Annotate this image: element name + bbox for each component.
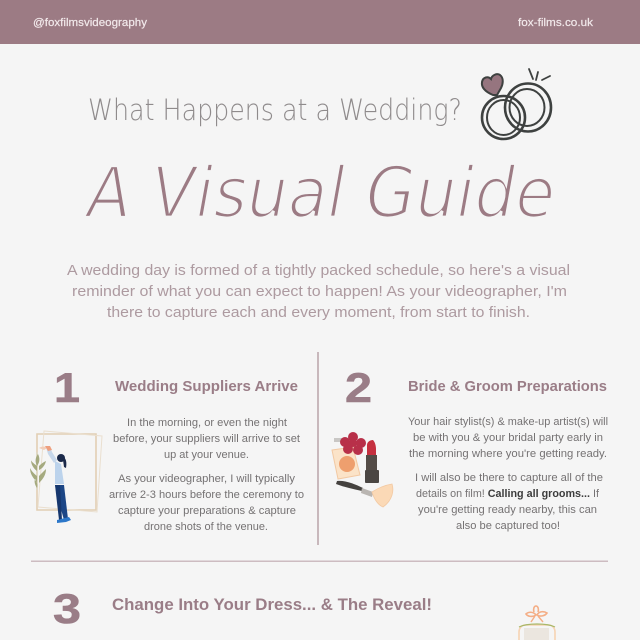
panel: step 3 <box>53 585 555 640</box>
text: step 2 body: details on film! Calling all grooms... If <box>416 488 600 500</box>
text: step 2 body: Your hair stylist(s) & make-up artist(s) will <box>408 416 608 428</box>
number 3: 3 <box>53 585 81 632</box>
text: step 1 body: In the morning, or even the night <box>127 417 287 429</box>
number 1: 1 <box>54 364 80 411</box>
text: step 1 body: before, your suppliers will arrive to set <box>113 433 300 445</box>
intro text: reminder of what you can expect to happen! As your videographer, I'm <box>72 283 567 300</box>
intro text: there to capture each and every moment, from start to finish. <box>107 304 530 321</box>
divider: horizontal <box>31 560 608 562</box>
text: step 1 body: arrive 2-3 hours before the ceremony to <box>109 489 304 501</box>
text: step 1 body <box>109 417 304 533</box>
text: step 1 body: capture your preparations & capture <box>118 505 296 517</box>
header bar: fox-films.co.uk <box>518 17 594 29</box>
icon: perfume, lipstick and brush <box>332 432 393 507</box>
heading: Bride & Groom Preparations: Bride & Groom Preparations <box>408 378 607 395</box>
intro text: A wedding day is formed of a tightly packed schedule, so here's a visual <box>67 262 570 279</box>
text: step 2 body: the morning where you're getting ready. <box>409 448 607 460</box>
heading: Change Into Your Dress... & The Reveal!: Change Into Your Dress... & The Reveal! <box>112 595 432 614</box>
panel: step 2 <box>332 364 608 532</box>
text: step 2 body: be with you & your bridal party early in <box>413 432 603 444</box>
text: step 1 body: drone shots of the venue. <box>144 521 268 533</box>
text: step 2 body <box>408 416 608 532</box>
title: A Visual Guide: A Visual Guide <box>83 152 555 234</box>
title: What Happens at a Wedding?: What Happens at a Wedding? <box>88 93 462 127</box>
heading: Wedding Suppliers Arrive: Wedding Suppliers Arrive <box>115 378 298 395</box>
icon: wedding rings with heart <box>482 69 551 139</box>
text: step 1 body: up at your venue. <box>164 449 249 461</box>
text: step 1 body: As your videographer, I will typically <box>118 473 296 485</box>
icon: gift box with bow <box>519 606 555 640</box>
header bar <box>0 0 640 44</box>
intro text <box>67 262 570 321</box>
text: step 2 body: I will also be there to capture all of the <box>415 472 603 484</box>
text: step 2 body: also be captured too! <box>456 520 560 532</box>
icon: woman hanging frame with plant <box>30 431 102 523</box>
divider: vertical <box>318 352 319 545</box>
header bar: @foxfilmsvideography <box>33 17 148 29</box>
text: step 2 body: you're getting ready nearby, this can <box>418 504 597 516</box>
number 2: 2 <box>345 364 372 411</box>
panel: step 1 <box>30 364 304 533</box>
